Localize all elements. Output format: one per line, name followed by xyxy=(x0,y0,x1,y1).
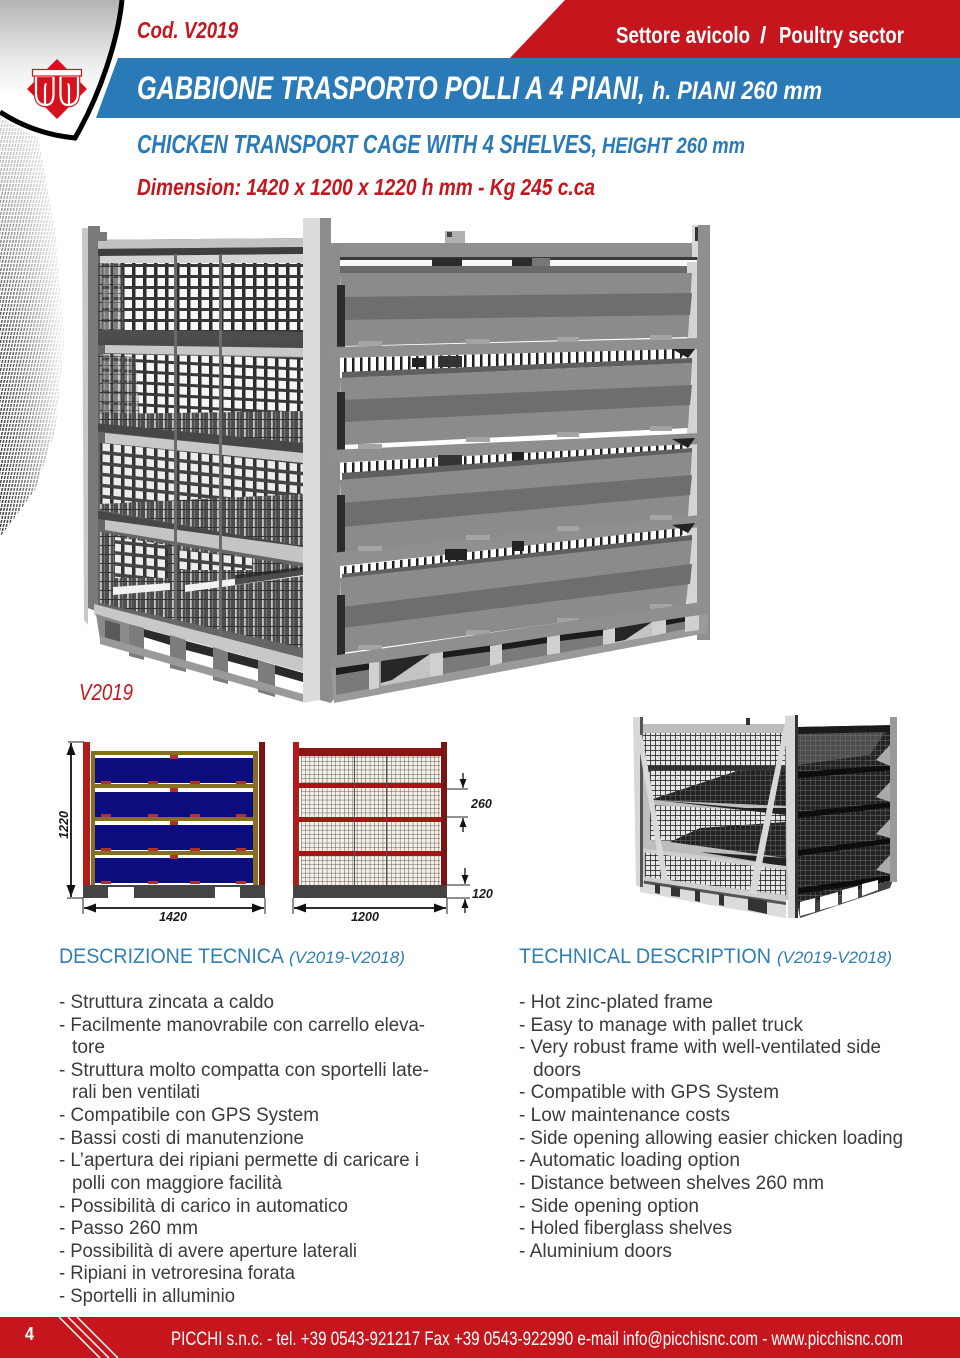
feature list: - Very robust frame with well-ventilated side xyxy=(519,1037,881,1058)
title bar xyxy=(96,58,960,118)
dimension: depth 1200: 1200 xyxy=(351,910,379,924)
secondary cage photo xyxy=(633,715,897,918)
feature list: - L’apertura dei ripiani permette di caricare i xyxy=(59,1150,419,1171)
door 1 xyxy=(337,273,692,347)
dimension: width 1420: 1420 xyxy=(159,910,187,924)
feature list: - Passo 260 mm xyxy=(59,1218,198,1239)
blue doors xyxy=(95,758,253,883)
dimension: pallet 120 xyxy=(447,868,493,913)
header: sector banner: / xyxy=(760,22,767,48)
title bar: h. PIANI 260 mm xyxy=(652,77,822,105)
feature list: doors xyxy=(533,1060,581,1081)
feature list: - Possibilità di carico in automatico xyxy=(59,1196,348,1217)
feature list: - Facilmente manovrabile con carrello eleva- xyxy=(59,1015,425,1036)
feature list: - Compatibile con GPS System xyxy=(59,1105,319,1126)
feature list: - Compatible with GPS System xyxy=(519,1082,779,1103)
rail and gap 2 xyxy=(331,433,700,480)
feature list: - Possibilità di avere aperture laterali xyxy=(59,1241,357,1262)
posts and diagonals xyxy=(633,715,897,918)
panel: Italian technical description xyxy=(59,945,429,1307)
dimension: shelf pitch 260 xyxy=(447,773,492,832)
door 4 xyxy=(337,540,692,656)
right side frame xyxy=(331,225,710,703)
subtitle: CHICKEN TRANSPORT CAGE WITH 4 SHELVES, xyxy=(137,129,597,159)
feature list xyxy=(519,992,903,1262)
feature list: - Distance between shelves 260 mm xyxy=(519,1173,824,1194)
feature list: - Holed fiberglass shelves xyxy=(519,1218,732,1239)
header: sector banner xyxy=(510,0,960,58)
dimension: width 1420 xyxy=(83,898,265,924)
rail and gap 1 xyxy=(331,338,700,378)
feature list: rali ben ventilati xyxy=(72,1082,200,1103)
page number: 4 xyxy=(25,1324,34,1344)
feature list: - Bassi costi di manutenzione xyxy=(59,1128,304,1149)
pallet xyxy=(83,885,265,898)
heading: (V2019-V2018) xyxy=(289,948,405,967)
dimension: height 1220 xyxy=(57,742,84,898)
header: sector banner: Poultry sector xyxy=(779,22,904,48)
subtitle: HEIGHT 260 mm xyxy=(602,133,745,158)
dimension: depth 1200 xyxy=(293,898,447,924)
hinges xyxy=(101,755,246,884)
corner panel with logo xyxy=(0,0,122,138)
header: sector banner: Settore avicolo xyxy=(616,22,750,48)
footer bar xyxy=(0,1317,960,1358)
dark side xyxy=(798,725,893,918)
feature list: - Side opening allowing easier chicken loading xyxy=(519,1128,903,1149)
feature list: - Automatic loading option xyxy=(519,1150,740,1171)
centre post xyxy=(303,218,331,703)
title bar: GABBIONE TRASPORTO POLLI A 4 PIANI, xyxy=(137,70,645,106)
pallet xyxy=(640,880,786,918)
door 3 xyxy=(337,452,692,555)
halftone side pattern xyxy=(0,118,64,537)
technical drawing: front view xyxy=(83,742,265,898)
feature list: - Low maintenance costs xyxy=(519,1105,730,1126)
olive rails xyxy=(91,751,258,855)
technical drawing: side view xyxy=(293,742,447,898)
feature list: - Aluminium doors xyxy=(519,1241,672,1262)
feature list: - Easy to manage with pallet truck xyxy=(519,1015,803,1036)
heading: (V2019-V2018) xyxy=(777,948,892,967)
panel: English technical description xyxy=(519,945,903,1262)
heading: DESCRIZIONE TECNICA xyxy=(59,945,284,968)
product label: V2019 xyxy=(79,679,133,705)
feature list: polli con maggiore facilità xyxy=(72,1173,282,1194)
heading: TECHNICAL DESCRIPTION xyxy=(519,945,771,968)
left wire side xyxy=(82,226,303,672)
feature list: - Hot zinc-plated frame xyxy=(519,992,713,1013)
feature list xyxy=(59,992,429,1307)
feature list: - Ripiani in vetroresina forata xyxy=(59,1263,295,1284)
feature list: - Struttura zincata a caldo xyxy=(59,992,274,1013)
icon: company logo xyxy=(27,59,87,119)
feature list: tore xyxy=(72,1037,105,1058)
mesh side xyxy=(640,724,790,902)
right pallet base xyxy=(331,601,708,703)
dimension: pallet 120: 120 xyxy=(472,887,493,901)
main cage photo xyxy=(82,218,710,703)
rail and gap 3 xyxy=(331,515,700,581)
feature list: - Sportelli in alluminio xyxy=(59,1286,235,1307)
heading xyxy=(59,945,405,968)
door hinges xyxy=(358,335,672,650)
door 2 xyxy=(337,363,692,450)
product code: Cod. V2019 xyxy=(137,17,238,43)
dimension: height 1220: 1220 xyxy=(57,811,71,839)
feature list: - Side opening option xyxy=(519,1196,699,1217)
dimensions line: Dimension: 1420 x 1200 x 1220 h mm - Kg 245 c.ca xyxy=(137,174,595,200)
feature list: - Struttura molto compatta con sportelli late- xyxy=(59,1060,429,1081)
dimension: shelf pitch 260: 260 xyxy=(470,797,492,811)
left pallet base xyxy=(94,604,303,702)
